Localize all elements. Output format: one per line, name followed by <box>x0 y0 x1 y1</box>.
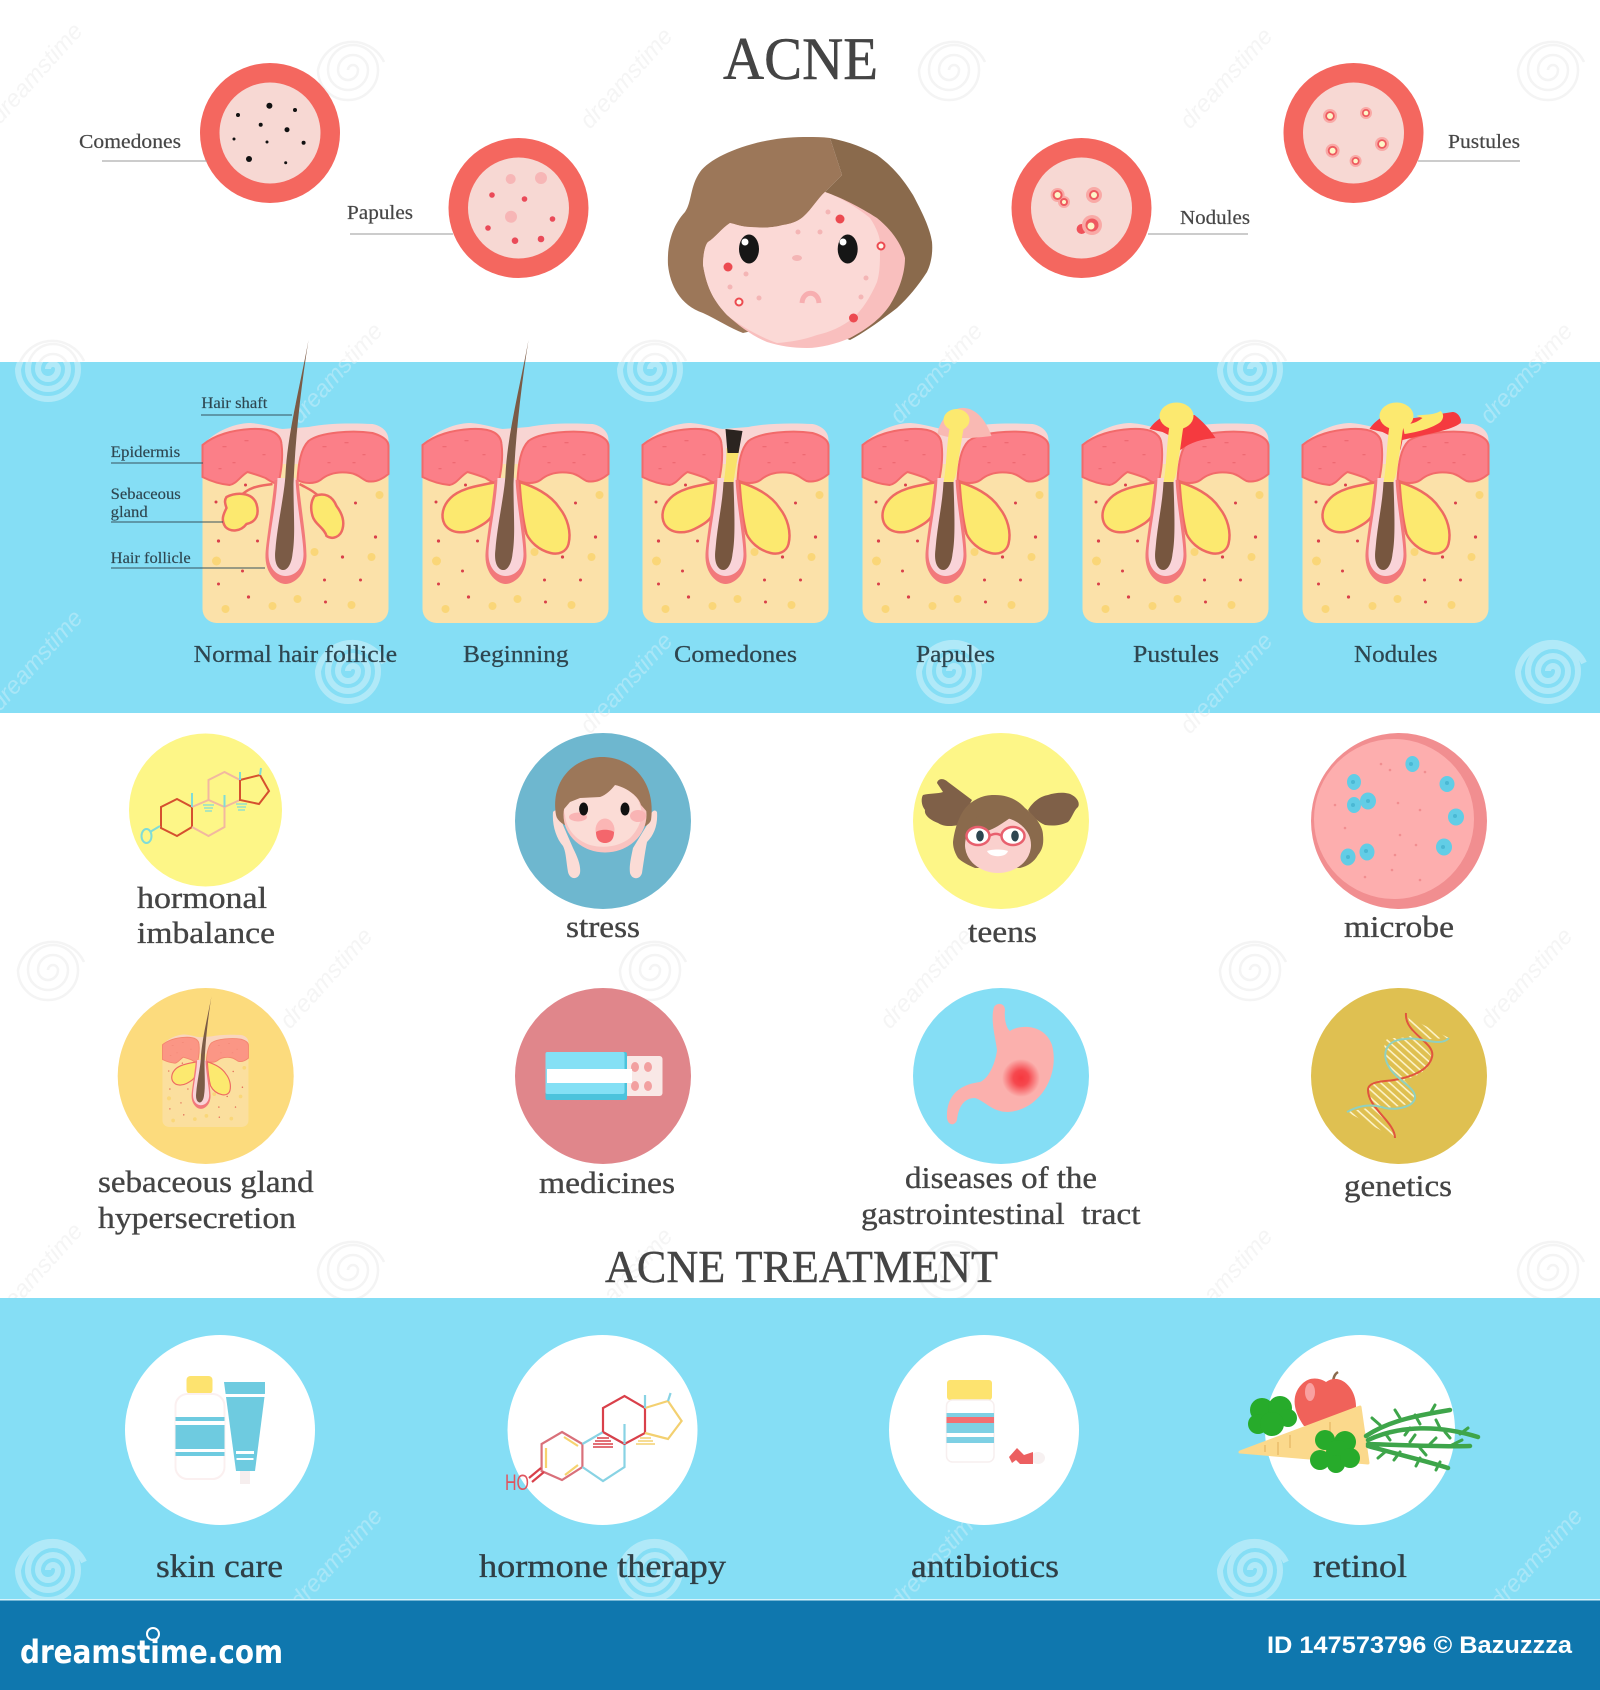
watermark on white: dreamstime <box>1474 318 1578 429</box>
caption: medicines: medicines <box>539 1165 675 1200</box>
watermark on white: dreamstime <box>874 923 978 1034</box>
caption: retinol: retinol <box>1313 1549 1407 1585</box>
caption: antibiotics: antibiotics <box>911 1549 1059 1585</box>
treatment: skin care <box>125 1335 315 1525</box>
stage captions: Beginning <box>463 642 568 668</box>
label: papules <box>347 202 453 234</box>
watermark on white: dreamstime <box>1174 628 1278 739</box>
cause: hormonal imbalance <box>129 734 282 886</box>
cause: microbe <box>1311 733 1487 909</box>
treatment: hormone therapy: HO <box>505 1470 529 1495</box>
footer bar: ID 147573796 © Bazuzzza <box>1267 1632 1573 1659</box>
watermark on blue bands: dreamstime <box>284 318 388 429</box>
watermark on blue bands: dreamstime <box>1174 628 1278 739</box>
skin circle: comedones <box>200 63 340 203</box>
caption: teens: teens <box>968 914 1037 949</box>
caption: stress: stress <box>566 909 640 944</box>
caption: hormonal imbalance: imbalance <box>137 915 275 950</box>
stage captions <box>194 642 1438 668</box>
skin circle: papules <box>448 138 588 278</box>
caption: hormone therapy: hormone therapy <box>479 1549 727 1585</box>
watermark on blue bands: dreamstime <box>1484 1503 1588 1614</box>
caption: diseases of the gastrointestinal tract <box>861 1160 1141 1231</box>
cause: stress <box>515 733 691 909</box>
caption: genetics: genetics <box>1344 1168 1452 1203</box>
label: nodules <box>1148 207 1250 234</box>
caption: diseases of the gastrointestinal tract: diseases of the <box>905 1160 1097 1195</box>
caption: sebaceous gland hypersecretion: sebaceous gland <box>98 1164 314 1199</box>
caption: skin care: skin care <box>156 1549 283 1585</box>
follicle labels: anatomy callouts: Hair shaft <box>201 395 268 412</box>
caption: sebaceous gland hypersecretion <box>98 1164 314 1235</box>
footer bar: dreamstime.com <box>20 1633 283 1671</box>
cause: gastrointestinal tract <box>913 988 1089 1164</box>
follicle labels: anatomy callouts: gland <box>111 504 148 521</box>
label: comedones: Comedones <box>79 131 181 153</box>
watermark on white: dreamstime <box>1174 23 1278 134</box>
caption: hormonal imbalance: hormonal <box>137 880 267 915</box>
cause: sebaceous gland hypersecretion <box>118 988 294 1164</box>
follicle tile: nodules <box>1302 402 1488 623</box>
heading: acne treatment: ACNE TREATMENT <box>605 1241 998 1292</box>
stage captions: Papules <box>916 642 995 668</box>
watermark on white: dreamstime <box>284 318 388 429</box>
follicle tile: papules <box>862 408 1048 623</box>
watermark on blue bands: dreamstime <box>574 628 678 739</box>
watermark on white <box>0 18 1584 1334</box>
label: pustules: Pustules <box>1448 131 1520 153</box>
follicle tile: beginning <box>422 340 608 623</box>
treatment: retinol <box>1240 1335 1478 1525</box>
watermark on white: dreamstime <box>574 23 678 134</box>
stage captions: Pustules <box>1133 642 1219 668</box>
watermark on blue bands <box>0 318 1588 1614</box>
follicle labels: anatomy callouts: Epidermis <box>111 444 180 461</box>
cause: teens <box>913 733 1089 909</box>
footer bar <box>0 1599 1600 1690</box>
title: ACNE <box>723 26 878 92</box>
stage captions: Nodules <box>1354 642 1438 668</box>
skin circle: nodules <box>1012 138 1152 278</box>
face illustration <box>668 137 932 348</box>
caption: diseases of the gastrointestinal tract: gastrointestinal tract <box>861 1196 1141 1231</box>
skin circle: pustules <box>1284 63 1424 203</box>
watermark on blue bands: dreamstime <box>1474 318 1578 429</box>
cause: medicines <box>515 988 691 1164</box>
follicle labels: anatomy callouts <box>111 395 292 568</box>
watermark on white: dreamstime <box>574 628 678 739</box>
watermark on white: dreamstime <box>1474 923 1578 1034</box>
treatment: antibiotics <box>889 1335 1079 1525</box>
cause: genetics <box>1311 988 1487 1164</box>
band: treatment background <box>0 1298 1600 1600</box>
watermark on blue bands: dreamstime <box>284 1503 388 1614</box>
follicle labels: anatomy callouts: Sebaceous <box>111 486 181 503</box>
watermark on blue bands: dreamstime <box>884 1503 988 1614</box>
band: follicle stages background <box>0 362 1600 713</box>
label: pustules <box>1418 131 1520 161</box>
watermark on white: dreamstime <box>884 318 988 429</box>
follicle labels: anatomy callouts: Hair follicle <box>111 550 191 567</box>
watermark on white: dreamstime <box>274 923 378 1034</box>
follicle tile: pustules <box>1082 402 1268 623</box>
follicle tile: comedones <box>642 423 828 623</box>
caption: hormonal imbalance <box>137 880 275 950</box>
stage captions: Normal hair follicle <box>194 642 397 668</box>
treatment: hormone therapy <box>505 1335 698 1525</box>
label: comedones <box>79 131 207 161</box>
watermark on white: dreamstime <box>574 1223 678 1334</box>
caption: microbe: microbe <box>1344 909 1454 944</box>
stage captions: Comedones <box>674 642 797 668</box>
label: papules: Papules <box>347 202 413 224</box>
watermark on white: dreamstime <box>1174 1223 1278 1334</box>
caption: sebaceous gland hypersecretion: hypersecretion <box>98 1200 297 1235</box>
label: nodules: Nodules <box>1180 207 1250 229</box>
watermark on blue bands: dreamstime <box>884 318 988 429</box>
follicle tile: normal hair follicle <box>202 340 388 623</box>
